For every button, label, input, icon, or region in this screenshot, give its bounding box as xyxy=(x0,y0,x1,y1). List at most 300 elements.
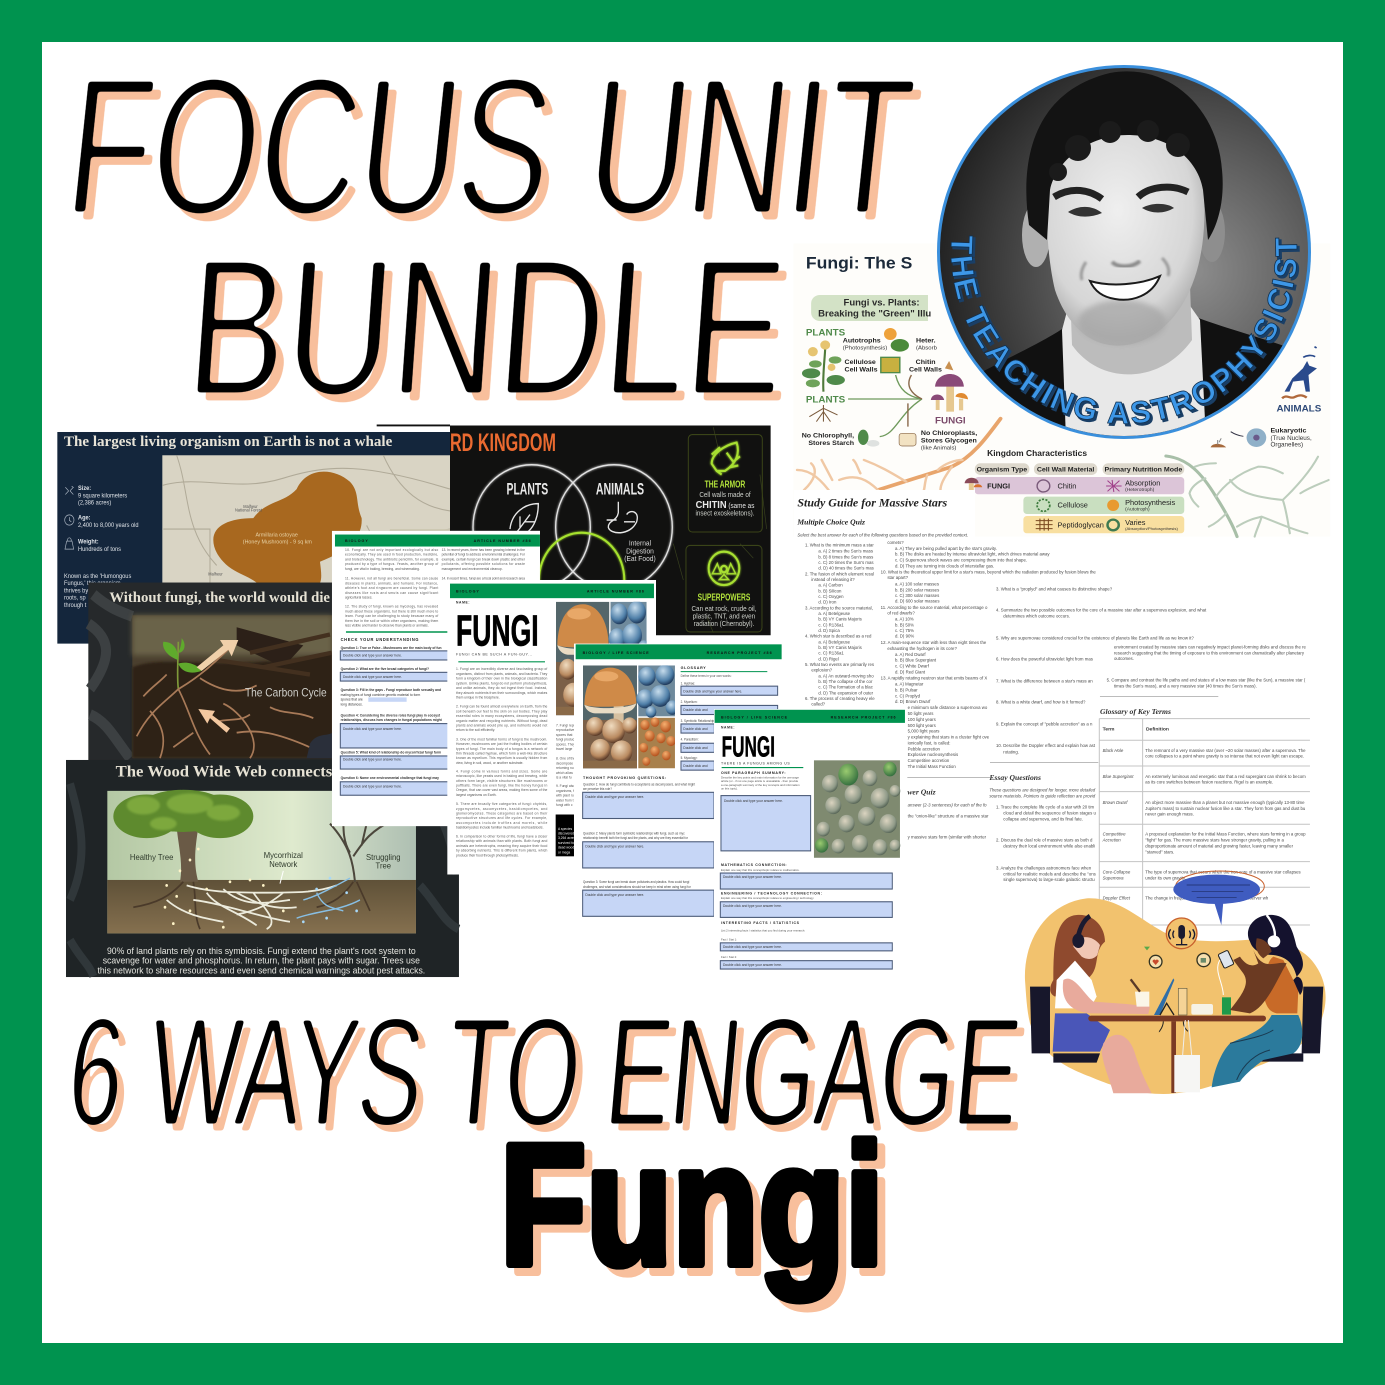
article body text: 1. Fungi are an incredibly diverse and fascinating group of xyxy=(456,667,547,671)
microphone badge xyxy=(1166,918,1197,949)
document: article 86 page two: learn. Fungi can be challenging to study because many of xyxy=(345,614,438,618)
kingdom characteristics table xyxy=(965,449,1184,533)
quiz questions: d. D) Red Giant xyxy=(895,670,926,675)
map: Armillaria ostoyae xyxy=(255,532,298,538)
mushroom photo xyxy=(583,665,679,768)
map: Malheur xyxy=(208,571,223,577)
mycorrhizal network image: Tree xyxy=(376,861,392,870)
quiz questions: explosion? xyxy=(811,668,833,673)
slide: third kingdom: RD KINGDOM xyxy=(450,430,556,457)
moss photo xyxy=(814,760,900,858)
article body text: view, living in soil, wood, or another substrate. xyxy=(456,761,523,765)
glossary table: Glossary of Key Terms xyxy=(1100,707,1171,716)
callout box: 3,264 acres xyxy=(558,836,576,840)
document: fungi article cover: FUNGI CAN BE SUCH A FUN-GUY... xyxy=(456,652,533,657)
callout box: discovered xyxy=(558,831,574,836)
green heading pill xyxy=(811,295,932,321)
heading: focus unit bundle: FOCUS UNIT xyxy=(58,36,923,256)
glossary fields: Double click and xyxy=(683,746,708,750)
heading: fungi: Fungi xyxy=(508,1117,892,1309)
kingdom characteristics table: (Heterotroph) xyxy=(1125,487,1155,493)
document: research project summary: ONE PARAGRAPH SUMMARY: xyxy=(721,771,786,775)
slide stats: Weight: xyxy=(78,539,99,546)
animals diagram: Organelles) xyxy=(1270,442,1303,449)
document: article 86 page two: much about these organisms, but there is still much more to xyxy=(345,609,438,613)
glossary fields: GLOSSARY xyxy=(681,666,706,670)
essay questions: These questions are designed for longer, more detailed xyxy=(989,788,1096,793)
panel: superpowers: plastic, TNT, and even xyxy=(693,613,755,621)
portrait photo xyxy=(937,65,1311,440)
slide caption xyxy=(97,945,425,975)
document: research project summary: article (or - if not one page article is unavailable - then provide xyxy=(721,779,798,783)
quiz questions: b. B) Pulsar xyxy=(895,687,918,692)
kingdom characteristics table: Kingdom Characteristics xyxy=(987,449,1087,458)
slide: third kingdom: Internal xyxy=(629,540,652,548)
document: article 86 page two: management and environmental cleanup. xyxy=(442,567,503,571)
quiz questions: Select the best answer for each of the following questions based on the provided context. xyxy=(797,533,968,538)
document: fungi article cover: fungi produce xyxy=(556,738,576,742)
plant and fungi diagram: PLANTS xyxy=(806,328,846,339)
quiz questions: b. B) Blue Supergiant xyxy=(895,658,937,663)
panel: superpowers: radiation (Chernobyl). xyxy=(694,621,754,628)
essay questions: the "onion-like" structure of a massive star xyxy=(908,814,989,819)
quiz questions: 4. Which star is described as a red xyxy=(805,634,872,639)
mycorrhizal network image xyxy=(107,790,416,933)
mushroom photo xyxy=(556,601,651,715)
heading: focus unit bundle: FOCUS UNIT xyxy=(66,44,931,264)
animals diagram: (True Nucleus, xyxy=(1270,435,1312,442)
quiz questions: a. A) Betelgeuse xyxy=(818,639,851,644)
document: article 86 page two xyxy=(332,531,540,826)
slide caption: this network to share resources and even send chemical warnings about pest attacks. xyxy=(97,965,425,975)
green animal roots xyxy=(1166,456,1329,537)
document: article 86 page two: Question 6: Name one environmental challenge that fungi may xyxy=(341,776,439,780)
mycorrhizal network image: Network xyxy=(269,860,298,869)
glossary table: core collapses to a point where gravity is so intense that not even light can escape. xyxy=(1145,754,1304,759)
plant and fungi diagram: Cell Walls xyxy=(845,367,878,374)
map: (Honey Mushroom) - 9 sq km xyxy=(243,539,312,546)
document: article 86 page two: athlete's foot and ringworm are caused by fungi. Plant xyxy=(345,586,438,590)
kingdom characteristics table: Varies xyxy=(1125,518,1146,527)
plant and fungi diagram: No Chloroplasts, xyxy=(921,430,977,437)
study guide title: Multiple Choice Quiz xyxy=(796,518,865,527)
glossary table: never gain enough mass. xyxy=(1145,812,1194,817)
essay questions: environment created by massive stars can negatively impact planet-forming disks and discuss the re xyxy=(1114,644,1307,649)
glossary table xyxy=(1099,707,1310,925)
essay questions: critical for realistic models and describe the "ons xyxy=(1003,871,1096,876)
document: research project summary: Describe the key points and main information for the one-page xyxy=(721,775,799,780)
document: article 86 page two: potential of fungi to address environmental challenges. For xyxy=(442,552,526,557)
glossary table: The remnant of a very massive star (over ~20 solar masses) after a supernova. The xyxy=(1145,748,1306,753)
quiz questions: d. D) Spica xyxy=(818,628,840,633)
thought provoking questions: Double click and type your answer here. xyxy=(585,844,644,849)
orange fungal roots xyxy=(797,419,1000,495)
quiz questions: Competitive accretion xyxy=(908,758,950,763)
article body text: reproductive structures and life cycles. For example, xyxy=(456,816,547,820)
article body text: others form large, visible structures like mushrooms or xyxy=(456,779,548,783)
quiz questions: ionically fast, is called: xyxy=(908,741,950,746)
document: fungi article cover: BIOLOGY xyxy=(456,590,480,594)
essay questions: 1. Trace the complete life cycle of a star with 20 tim xyxy=(996,805,1095,810)
slide stats: Known as the 'Humongous xyxy=(64,574,131,580)
glossary fields: 3. Symbiotic Relationship: xyxy=(681,719,715,723)
slide stats: through t xyxy=(64,603,87,609)
quiz questions: The Initial Mass Function xyxy=(908,764,956,769)
essay questions xyxy=(907,644,1307,882)
quiz questions: 5. What two events are primarily res xyxy=(805,662,874,667)
document: article 86 page two: Double click and type your answer here. xyxy=(343,784,402,789)
quiz questions: 500 light years xyxy=(908,723,936,728)
connection sections: Fact / Stat 2: xyxy=(721,955,737,959)
essay questions: 2. Discuss the dual role of massive stars as both d xyxy=(996,838,1093,843)
thought provoking questions: we perceive this role? xyxy=(583,787,612,791)
document: fungi article cover: spores that xyxy=(556,733,572,737)
carbon cycle forest image xyxy=(132,615,332,758)
document: article 86 page two: produced by a type of fungus. Yeasts, another group of xyxy=(345,562,438,566)
slide stats xyxy=(64,486,139,609)
glossary fields: Double click and xyxy=(683,727,708,731)
panel: the armor xyxy=(688,435,762,532)
kingdom characteristics table: (Autotroph) xyxy=(1125,507,1150,513)
infographic title: Fungi: The S xyxy=(806,253,912,272)
slide stats: roots, sp xyxy=(64,595,86,602)
panel: study guide for massive stars xyxy=(794,490,1310,990)
circular name text: THE TEACHING ASTROPHYSICIST xyxy=(950,236,1298,424)
kingdom characteristics table: Absorption xyxy=(1125,479,1160,488)
plant and fungi diagram: FUNGI xyxy=(935,416,966,426)
animals diagram xyxy=(1211,347,1322,449)
document: fungi article cover: decompose xyxy=(556,761,573,765)
quiz questions: d. D) 90% xyxy=(895,634,914,639)
slide: wood wide web xyxy=(66,760,459,977)
document: research project summary: NAME: xyxy=(721,725,735,729)
slide: third kingdom: ANIMALS xyxy=(596,480,644,499)
table and bag xyxy=(1088,988,1266,1093)
article body text: soil beneath our feet to the skin on our bodies. They play xyxy=(456,709,548,713)
quiz questions: 12. A main-sequence star with less than eight times the xyxy=(881,640,987,645)
quiz questions: Pebble accretion xyxy=(908,746,940,751)
article body text: largest organisms on Earth. xyxy=(456,793,497,797)
article body text: Oregon, that can cover vast areas, making them some of the xyxy=(456,788,547,792)
quiz questions: of red dwarfs? xyxy=(887,611,915,616)
glossary table: Accretion xyxy=(1102,838,1121,843)
slide: without fungi: Without fungi, the world would die xyxy=(109,590,330,606)
article body text: return to the soil efficiently. xyxy=(456,728,495,732)
connection sections: MATHEMATICS CONNECTION: xyxy=(721,863,787,867)
article body text: 4. Fungi come in various forms and sizes. Some are xyxy=(456,769,547,773)
article body text: 6. In comparison to other forms of life, fungi have a closer xyxy=(456,834,548,838)
map: Malheur xyxy=(243,504,258,509)
quiz questions: b. B) The collapse of the cor xyxy=(818,679,873,684)
quiz questions: a. A) 10% xyxy=(895,617,914,622)
document: article 86 page two: less visible and harder to observe than plants or animals. xyxy=(345,623,429,628)
speech bubble xyxy=(1173,871,1264,925)
article body text: system. Unlike plants, fungi do not perform photosynthesis, xyxy=(456,681,547,685)
connection sections: Double click and type your answer here. xyxy=(723,875,782,879)
animals diagram: Eukaryotic xyxy=(1270,428,1307,435)
quiz questions: 50 light years xyxy=(908,711,933,716)
heading: fungi: Fungi xyxy=(500,1109,884,1301)
essay questions: wer Quiz xyxy=(907,788,936,797)
glossary fields: Double click and xyxy=(683,764,708,768)
quiz questions: called? xyxy=(811,702,826,707)
slide stats: (2,386 acres) xyxy=(78,501,111,507)
callout box: dead wood xyxy=(558,846,574,850)
document: fungi article cover xyxy=(447,580,656,874)
quiz questions: a. A) An outward-moving sho xyxy=(818,673,874,678)
quiz questions: b. B) Silicon xyxy=(818,588,842,593)
document: article 86 page two: relationships, discuss how changes in fungal populations might xyxy=(341,718,443,722)
quiz questions: d. D) 600 solar masses xyxy=(895,599,940,604)
study guide title: Study Guide for Massive Stars xyxy=(797,496,947,510)
quiz questions: determines which outcome occurs. xyxy=(1003,614,1070,619)
document: article 86 page two: them live in the soil or within other organisms, making them xyxy=(345,619,438,623)
article body text: types of fungi. The main body of a fungus is a network of xyxy=(456,747,547,751)
callout box xyxy=(556,815,576,856)
thought provoking questions: Question 3: Some fungi can break down pollutants and plastics. How could fungi xyxy=(583,880,690,884)
connection sections: Fact / Stat 1: xyxy=(721,937,737,941)
article body text: they absorb nutrients from their surroundings, which makes xyxy=(456,691,548,695)
document: article 86 page two: Question 2: What are the five broad categories of fungi? xyxy=(341,667,429,671)
article body text: zygomycetes, ascomycetes, basidiomycetes, and xyxy=(456,807,547,811)
panel: fungi vs plants infographic xyxy=(794,243,1330,537)
connection sections: Double click and type your answer here. xyxy=(723,904,782,908)
plant and fungi diagram: Cell Walls xyxy=(909,367,942,374)
glossary table: Supernova xyxy=(1103,875,1124,880)
slide caption: scavenge for water and phosphorus. In return, the plant pays with sugar. Trees use xyxy=(103,955,420,966)
quiz questions: 3. According to the source material, xyxy=(805,605,873,610)
plant and fungi diagram: Heter. xyxy=(916,338,936,345)
document: article 86 page two: diseases like rusts and smuts can cause significant xyxy=(345,591,438,595)
mycorrhizal network image: Mycorrhizal xyxy=(264,851,303,860)
slide: third kingdom xyxy=(377,425,771,635)
venn diagram xyxy=(473,465,672,627)
kingdom characteristics table: (Absorption/Photosynthesis) xyxy=(1125,526,1179,531)
slide: third kingdom: PLANTS xyxy=(506,480,548,499)
kingdom characteristics table: FUNGI xyxy=(987,482,1010,490)
document: fungi article cover: returning nu xyxy=(556,766,574,770)
quiz questions: y explaining that stars in a cluster fight ove xyxy=(908,735,990,740)
article body text: organisms, distinct from plants, animals, and bacteria. They xyxy=(456,672,548,676)
article body text: produce their food through photosynthesis. xyxy=(456,853,519,857)
quiz questions: c. C) R136a1 xyxy=(818,651,844,656)
document: article 86 page two: 12. The study of fungi, known as mycology, has revealed xyxy=(345,604,438,609)
document: fungi article cover: with plant ro xyxy=(556,794,574,798)
connection sections: Double click and type your answer here. xyxy=(723,945,782,949)
article body text xyxy=(456,667,548,857)
quiz questions: 3. What is a "proplyd" and what causes its distinctive shape? xyxy=(996,587,1113,592)
document: article 86 page two: 10. Fungi are not only important ecologically but also xyxy=(345,548,438,552)
quiz questions: d. D) 40 times the Sun's mas xyxy=(818,566,874,571)
essay questions: y massive stars form (similar with shorter xyxy=(908,834,987,839)
panel: the armor: CHITIN (same as xyxy=(696,500,755,511)
icon: leaf xyxy=(510,504,538,544)
connection sections: Double click and type your answer here. xyxy=(723,963,782,967)
quiz questions: a. A) Red Dwarf xyxy=(895,652,926,657)
glossary table: The type of supernova that occurs when the iron core of a massive star collapses xyxy=(1145,869,1301,874)
essay questions: cloud and detail the sequence of fusion stages u xyxy=(1003,811,1097,816)
plant and fungi diagram: (like Animals) xyxy=(921,445,956,451)
document: article 86 page two: Question 5: What kind of relationship do mycorrhizal fungi form xyxy=(341,750,441,754)
map: National Forest xyxy=(235,507,263,513)
quiz questions: instead of releasing it? xyxy=(811,577,855,582)
glossary table: Core-Collapse xyxy=(1103,869,1131,874)
document: article 86 page two: example, certain fungi can break down plastic and other xyxy=(442,557,526,561)
article body text: basidiomycetes include familiar mushrooms and toadstools. xyxy=(456,826,544,830)
callout box: or mega xyxy=(558,850,570,854)
thought provoking questions: challenges, and what considerations should we keep in mind when using fungi for xyxy=(583,885,691,889)
plant and fungi diagram: Cellulose xyxy=(845,359,876,366)
document: article 86 page two: long distances. xyxy=(341,702,363,706)
essay questions: outcomes. xyxy=(1114,656,1134,661)
quiz questions: a. A) They are being pulled apart by the star's gravity. xyxy=(895,546,997,551)
glossary fields: Double click and type your answer here. xyxy=(683,689,742,693)
project title: FUNGI xyxy=(722,730,775,763)
document: article 86 page two: Double click and type your answer here. xyxy=(343,654,402,658)
quiz questions: d. D) The expansion of outer xyxy=(818,690,874,695)
slide: largest living organism xyxy=(57,432,451,644)
quiz questions: b. B) VY Canis Majoris xyxy=(818,617,862,622)
glossary table: An extremely luminous and energetic star that a red supergiant can shrink to becom xyxy=(1145,774,1306,779)
quiz questions: 5,000 light years xyxy=(908,728,939,733)
document: article 86 page two: CHECK YOUR UNDERSTANDING xyxy=(341,637,419,642)
article body text: glomeromycetes. These categories are based on their xyxy=(456,811,548,816)
map xyxy=(162,455,451,591)
article body text: 2. Fungi can be found almost everywhere on Earth, from the xyxy=(456,704,547,709)
plant and fungi diagram: PLANTS xyxy=(806,395,846,406)
quiz questions: c. C) White Dwarf xyxy=(895,664,930,669)
glossary table: Competitive xyxy=(1103,832,1126,837)
slide stats: Age: xyxy=(78,515,91,522)
quiz questions: 100 light years xyxy=(908,717,936,722)
thought provoking questions: THOUGHT PROVOKING QUESTIONS: xyxy=(583,776,667,780)
quiz questions: a. A) Magnetar xyxy=(895,681,924,686)
thought provoking questions xyxy=(583,776,714,916)
glossary table: Term xyxy=(1103,727,1115,733)
article body text: ascomycetes include truffles and morels, while xyxy=(456,821,547,825)
document: article 86 page two: and biotechnology. The antibiotic penicillin, for example, is xyxy=(345,557,439,561)
document: article 86 page two: pollutants, offering possible solutions for waste xyxy=(442,562,525,566)
glossary table: Doppler Effect xyxy=(1103,895,1131,900)
article body text: 3. One of the most familiar forms of fungi is the mushroom. xyxy=(456,737,547,741)
document: fungi article cover: water from t xyxy=(556,798,574,802)
kingdom characteristics table: Peptidoglycan xyxy=(1058,520,1104,529)
document: research project summary xyxy=(714,709,906,984)
plant and fungi diagram: No Chlorophyll, xyxy=(802,432,854,439)
quiz questions: exhausting the hydrogen in its core? xyxy=(887,646,957,651)
document: article 86 page two: ARTICLE NUMBER #86 xyxy=(474,539,532,543)
panel: the armor: THE ARMOR xyxy=(705,479,745,490)
kingdom characteristics table: Cellulose xyxy=(1058,501,1088,510)
document: fungi article cover: 9. Fungi also xyxy=(556,784,575,788)
essay questions: destroy their local environment while also enabli xyxy=(1003,844,1095,849)
article body text: relationship with animals than with plants. Both fungi and xyxy=(456,839,547,843)
quiz questions: c. C) Supernova shock waves are compressing them into that shape. xyxy=(895,558,1027,563)
glossary fields: Define these terms in your own words: xyxy=(681,674,732,678)
quiz questions: 7. What is the difference between a star's mass an xyxy=(996,678,1093,683)
quiz questions: Explosive nucleosynthesis xyxy=(908,752,958,757)
panel: superpowers xyxy=(686,545,762,632)
glossary table: "fight" for gas. The more massive stars have stronger gravity, pulling in a xyxy=(1145,838,1284,843)
document: fungi article cover: organisms, f xyxy=(556,789,574,793)
heading: focus unit bundle xyxy=(58,36,931,445)
quiz questions: c. C) R136a1 xyxy=(818,622,844,627)
callout box: A species xyxy=(558,827,572,831)
kingdom characteristics table: Cell Wall Material xyxy=(1037,467,1094,474)
quiz questions: 2. The fusion of which element resul xyxy=(805,571,874,576)
document: research project summary: on this topic). xyxy=(721,786,738,790)
essay questions: times the Sun's mass), and a very massive star (40 times the Sun's mass). xyxy=(1114,683,1257,688)
slide stack: left presentation slides xyxy=(57,432,459,977)
slide stats: 2,400 to 8,000 years old xyxy=(78,523,139,529)
glossary table: Brown Dwarf xyxy=(1103,800,1128,805)
document: research project summary: THERE IS A FUNGUS AMONG US xyxy=(721,761,790,765)
article body text: puffballs. There are even fungi, like the honey fungus in xyxy=(456,783,547,788)
thought provoking questions: Double click and type your answer here. xyxy=(585,893,644,897)
document: article 86 page two: economically. They are used in food production, medicine, xyxy=(345,552,438,557)
quiz questions: b. B) 50% xyxy=(895,622,914,627)
document: article 86 page two: Question 1: True or False - Mushrooms are the main body of fun xyxy=(341,646,442,650)
document: article 86 page two: diseases in plants, animals, and humans. For instance, xyxy=(345,581,438,585)
document: fungi article cover: spores. They xyxy=(556,742,575,746)
quiz questions: a. A) Betelgeuse xyxy=(818,611,851,616)
article body text: essential roles in many ecosystems, decomposing dead xyxy=(456,714,547,718)
glossary table: Jupiter's mass) to sustain nuclear fusion like a star. They form from gas and dust bu xyxy=(1145,806,1306,811)
plant and fungi diagram: Autotrophs xyxy=(843,338,881,345)
glossary table: under its own gravity. xyxy=(1145,875,1186,880)
quiz questions: 11. According to the source material, what percentage o xyxy=(881,605,988,610)
thought provoking questions: relationship benefit both the fungi and the plants, and why are they essential for xyxy=(583,836,688,840)
article body text: thin threads called hyphae, which form a web-like structure xyxy=(456,751,547,756)
document: article 86 page two: 13. In recent years, there has been growing interest in the xyxy=(442,548,525,552)
heading: focus unit bundle: BUNDLE xyxy=(189,225,800,445)
slide: wood wide web: The Wood Wide Web connects xyxy=(116,764,333,780)
quiz questions: 8. What is a white dwarf, and how is it formed? xyxy=(996,700,1086,705)
glossary table: Black Hole xyxy=(1103,748,1124,753)
podcast illustration xyxy=(1025,871,1326,1094)
glossary table: disproportionate amount of material and growing faster, leaving many smaller xyxy=(1145,844,1294,849)
quiz questions: c. C) The formation of a blac xyxy=(818,685,874,690)
study guide title xyxy=(796,496,947,527)
quiz questions: 9. Explain the concept of "pebble accretion" as a n xyxy=(996,722,1093,727)
document: article 86 page two: Question 4: Considering the diverse roles fungi play in ecosyst xyxy=(341,713,441,717)
plant and fungi diagram: Chitin xyxy=(916,359,936,366)
quiz questions: c. C) 300 solar masses xyxy=(895,593,939,598)
green heading pill: Breaking the "Green" Illu xyxy=(818,309,932,318)
glossary table: Definition xyxy=(1146,727,1169,733)
quiz questions: c. C) Oxygen xyxy=(818,594,844,599)
panel: the armor: insect exoskeletons). xyxy=(695,510,755,517)
left woman xyxy=(1030,915,1174,1093)
document: article 86 page two: mating types of fungi combine genetic material to form xyxy=(341,693,420,697)
quiz questions: 6. The process of creating heavy ele xyxy=(805,696,875,701)
quiz questions: d. D) Rigel xyxy=(818,656,839,661)
quiz questions: rotating. xyxy=(1003,749,1019,754)
document: fungi article cover: 7. Fungi repr xyxy=(556,723,576,728)
document: research project summary: a one-paragraph summary of the key concepts and information xyxy=(721,783,800,787)
glossary table: A proposed explanation for the Initial Mass Function, where stars forming in a group xyxy=(1145,832,1306,837)
glossary fields: 1. Hyphae: xyxy=(681,681,695,685)
quiz questions: d. D) Brown Dwarf xyxy=(895,699,931,704)
essay questions: collapse and supernova, and its final fate. xyxy=(1003,816,1083,821)
callout box: survived fo xyxy=(558,841,574,845)
document: article 86 page two: fungi, are vital in baking, brewing, and winemaking. xyxy=(345,567,420,571)
slide stats: Fungus,' this organism xyxy=(64,581,121,587)
quiz questions: b. B) The disks are heated by intense ultraviolet light, which drives material away xyxy=(895,552,1050,557)
document: research project summary: RESEARCH PROJECT #86 xyxy=(831,715,897,720)
article body text: by absorbing nutrients. This is different from plants, which xyxy=(456,848,547,853)
essay questions: Essay Questions xyxy=(988,773,1041,782)
